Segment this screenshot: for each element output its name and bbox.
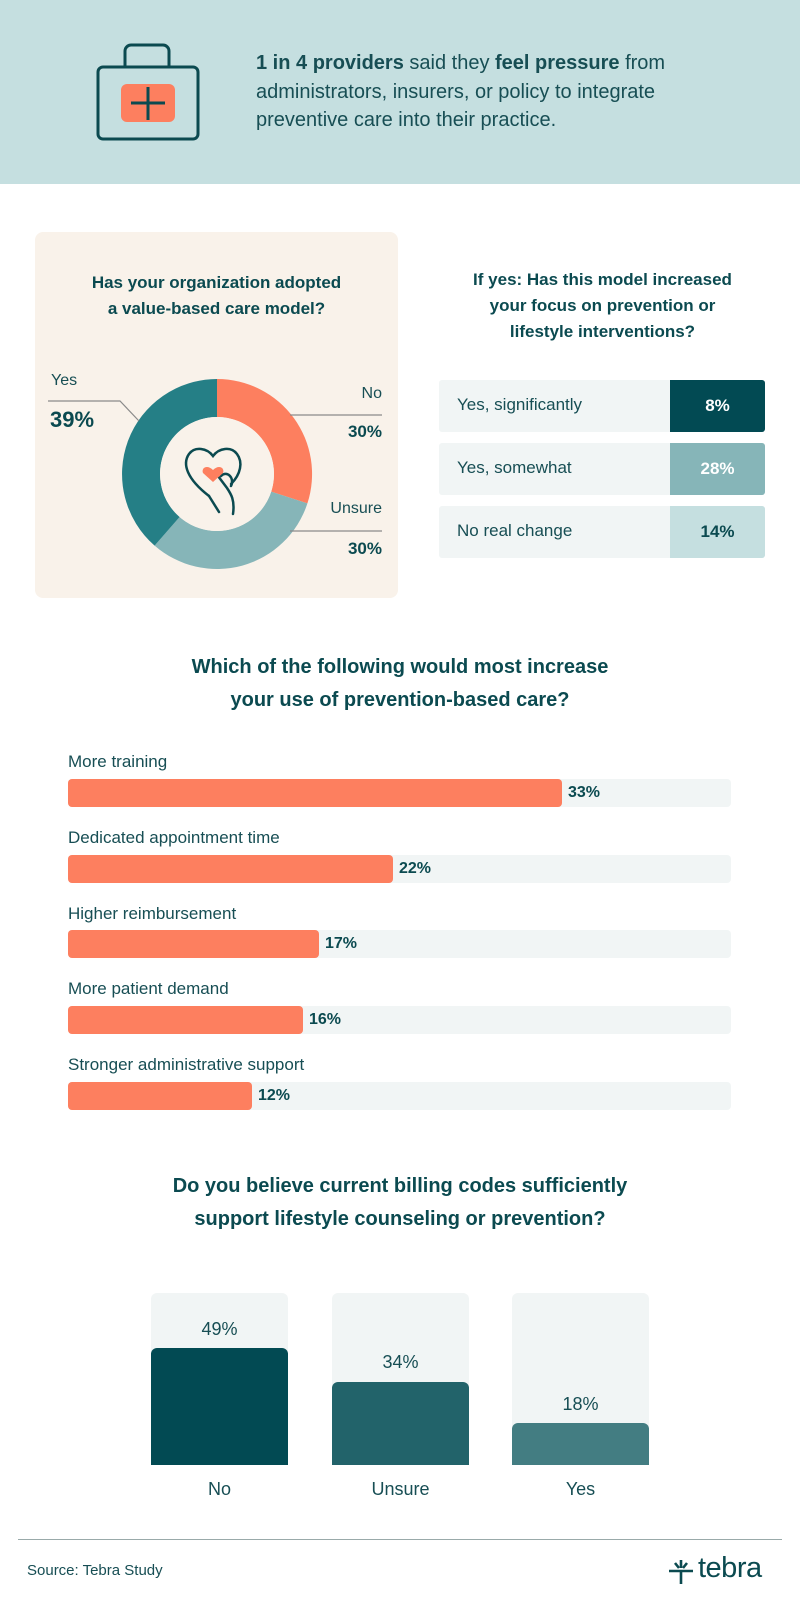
header text: 1 in 4 providers said they feel pressure from administrators, insurers, or policy to integrate preventive care into their practice.: [256, 52, 665, 131]
table rows: 8%: [705, 396, 730, 415]
icon: heart in hand: [186, 449, 240, 514]
right title: your focus on prevention or: [490, 296, 715, 315]
text: No real change: [457, 521, 572, 540]
logo: tebra: [669, 1552, 762, 1584]
donut title: Has your organization adopted: [92, 273, 341, 292]
horizontal bar chart: More training: [68, 752, 167, 771]
horizontal bar chart: 22%: [399, 860, 431, 877]
text: 14%: [700, 522, 735, 541]
horizontal bar chart: Dedicated appointment time: [68, 828, 280, 847]
source: Source: Tebra Study: [27, 1562, 163, 1579]
text: 30%: [348, 422, 382, 441]
bar chart title: [192, 656, 608, 711]
bar chart title: Which of the following would most increase: [192, 656, 608, 678]
right title: If yes: Has this model increased: [473, 270, 732, 289]
right title: [473, 270, 732, 341]
column chart: [151, 1293, 649, 1499]
text: 30%: [348, 539, 382, 558]
column chart: 34%: [382, 1352, 419, 1372]
text: No: [362, 385, 382, 402]
text: Unsure: [330, 500, 382, 517]
panel: value-based care donut: [35, 232, 398, 598]
text: 39%: [50, 407, 94, 432]
donut labels: Yes: [51, 372, 77, 389]
horizontal bar chart: More patient demand: [68, 979, 229, 998]
column chart: Yes: [566, 1479, 595, 1499]
logo: tebra: tebra: [698, 1552, 762, 1584]
column chart: 49%: [201, 1319, 238, 1339]
horizontal bar chart: 12%: [258, 1087, 290, 1104]
horizontal bar chart: 33%: [568, 784, 600, 801]
header banner: [0, 0, 800, 184]
billing title: [173, 1175, 628, 1230]
donut title: [92, 273, 341, 318]
column chart: Unsure: [371, 1479, 430, 1499]
icon: medical kit: [96, 44, 200, 140]
billing title: Do you believe current billing codes sufficiently: [173, 1175, 627, 1197]
horizontal bar chart: 16%: [309, 1011, 341, 1028]
right title: lifestyle interventions?: [510, 322, 695, 341]
horizontal bar chart: Higher reimbursement: [68, 904, 236, 923]
horizontal bar chart: 17%: [325, 935, 357, 952]
bar chart title: your use of prevention-based care?: [230, 689, 569, 711]
table rows: Yes, significantly: [457, 395, 582, 414]
text: Yes, somewhat: [457, 458, 572, 477]
horizontal bar chart: [68, 752, 731, 1110]
billing title: support lifestyle counseling or prevention?: [194, 1208, 606, 1230]
text: 28%: [700, 459, 735, 478]
column chart: No: [208, 1479, 231, 1499]
donut title: a value-based care model?: [108, 299, 325, 318]
donut chart: [48, 379, 382, 569]
table rows: [439, 380, 765, 432]
column chart: 18%: [562, 1394, 599, 1414]
horizontal bar chart: Stronger administrative support: [68, 1055, 304, 1074]
